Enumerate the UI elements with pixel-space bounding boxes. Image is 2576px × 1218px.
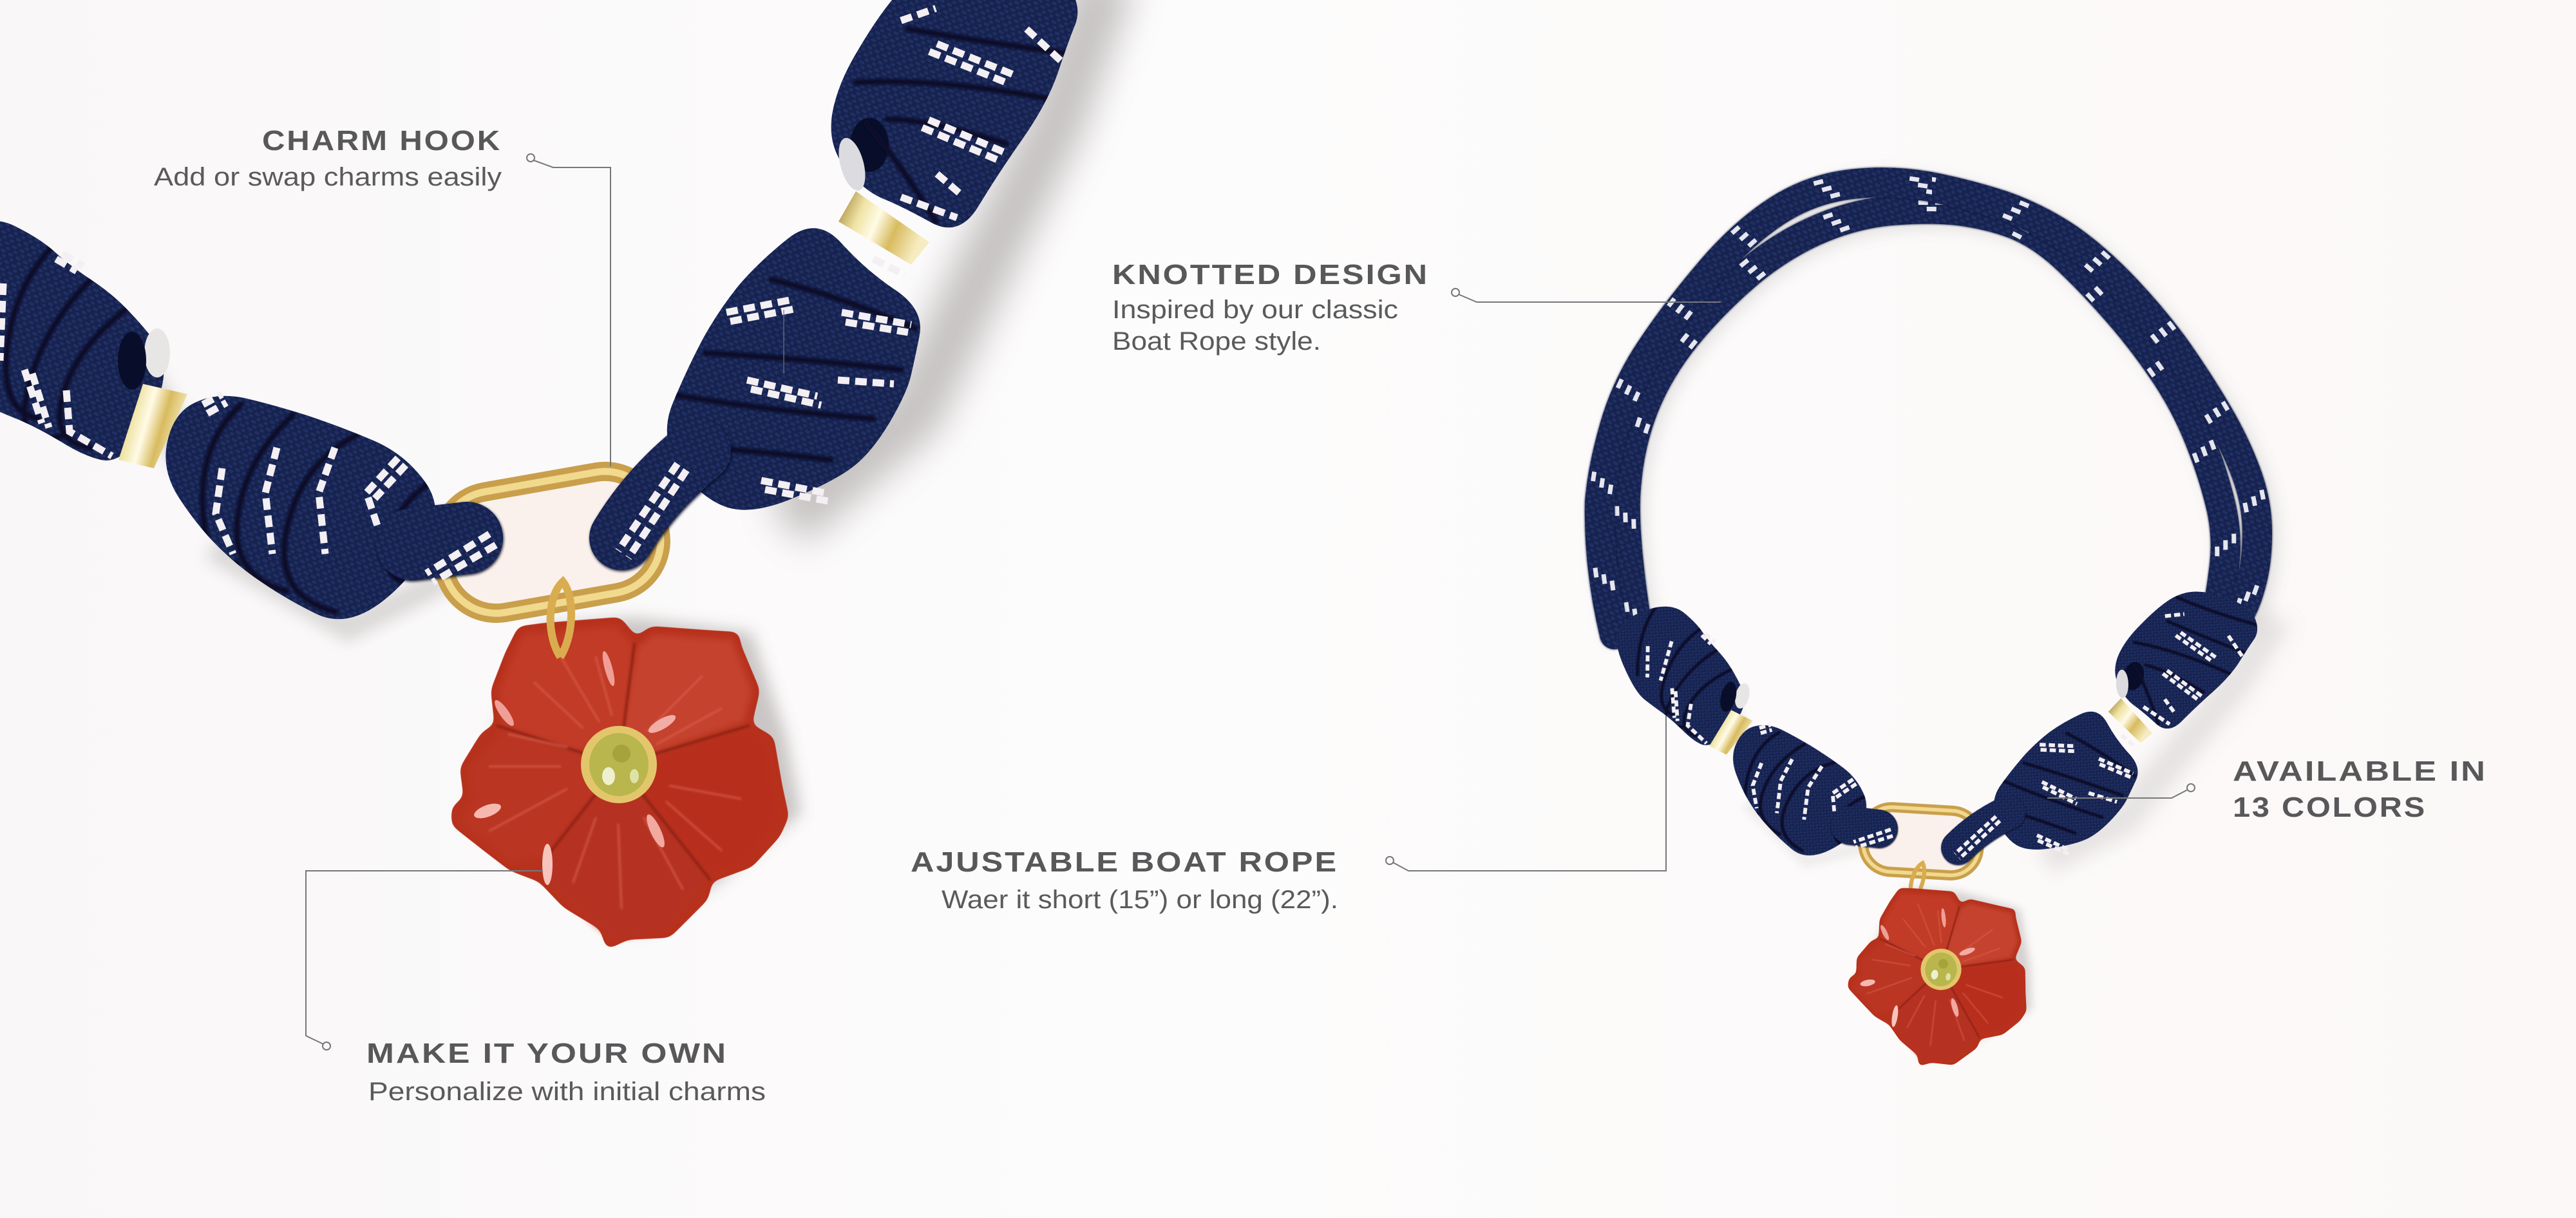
callout: knotted design — [1112, 260, 1721, 356]
charm shadow — [470, 618, 801, 934]
leader line — [1452, 289, 1721, 302]
callout: charm hook — [154, 126, 784, 466]
rope loop inner strand dashes, left side — [1615, 200, 1932, 616]
left rope knot with gold tube — [0, 220, 435, 619]
rope loop shadow — [1606, 187, 2264, 640]
rope loop inner strand dashes, right side — [1932, 203, 2236, 557]
leader line — [2047, 784, 2195, 798]
knots, ring and rope ends — [1573, 462, 2279, 968]
charm jump ring — [551, 582, 571, 657]
description: Personalize with initial charms — [368, 1078, 766, 1106]
panel: close-up of necklace — [0, 0, 1108, 946]
heading — [2233, 756, 2487, 823]
heading: KNOTTED DESIGN — [1112, 260, 1429, 290]
rope end left — [412, 534, 496, 582]
rope loop outer strand dashes, left side — [1591, 176, 1932, 591]
heading: CHARM HOOK — [262, 126, 502, 157]
rope end right — [618, 451, 699, 558]
rope loop inner strand — [1625, 209, 2226, 618]
heading: AVAILABLE IN — [2233, 756, 2487, 787]
leader line — [1386, 716, 1666, 871]
heading: 13 COLORS — [2233, 792, 2427, 823]
flower charm — [455, 620, 786, 946]
description: Add or swap charms easily — [154, 163, 502, 191]
callout: make it your own — [306, 871, 766, 1106]
description: Boat Rope style. — [1112, 327, 1321, 356]
flower charm shadow — [1846, 878, 2048, 1073]
heading: MAKE IT YOUR OWN — [366, 1038, 728, 1069]
description: Waer it short (15”) or long (22”). — [942, 886, 1338, 914]
rope loop outer strand dashes, right side — [1932, 176, 2266, 604]
rope shadows — [129, 0, 1108, 628]
panel: full bracelet view — [1573, 176, 2279, 1079]
flower charm — [1839, 879, 2041, 1079]
callout: available in 13 colors — [2047, 756, 2487, 823]
description — [1112, 296, 1398, 356]
leader line — [306, 871, 543, 1050]
callout: adjustable boat rope — [911, 716, 1666, 914]
heading: AJUSTABLE BOAT ROPE — [911, 847, 1338, 878]
description: Inspired by our classic — [1112, 296, 1398, 324]
right rope knot with gold tube — [667, 0, 1082, 510]
rope loop outer strand — [1600, 182, 2257, 634]
leader line — [527, 154, 784, 466]
charm hook ring — [432, 463, 669, 622]
